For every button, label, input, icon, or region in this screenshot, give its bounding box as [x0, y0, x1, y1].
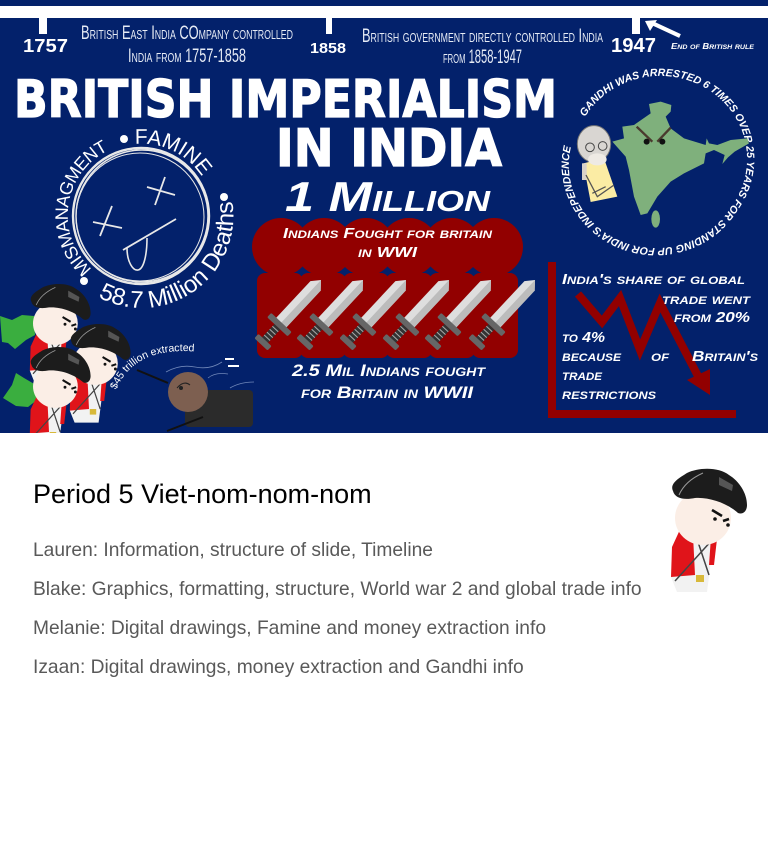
credit: Izaan: Izaan: Digital drawings, money extraction and Gandhi info	[33, 657, 524, 678]
credit: Melanie: Melanie: Digital drawings, Famine and money extraction info	[33, 618, 546, 639]
map of India	[612, 102, 749, 228]
trade text: trade	[562, 367, 603, 384]
falling trade arrow	[578, 294, 710, 395]
WWI text: Indians Fought for britain	[283, 225, 493, 242]
credit: Lauren: Lauren: Information, structure of slide, Timeline	[33, 540, 433, 561]
WWII text	[291, 361, 487, 402]
title	[14, 70, 557, 179]
East India Company text: British East India COmpany controlled	[81, 23, 293, 44]
flies and stench	[166, 358, 254, 388]
Gandhi figure	[577, 126, 617, 202]
famine ring text	[55, 129, 234, 308]
famine ring text: FAMINE	[136, 129, 213, 176]
British government text	[362, 26, 603, 68]
fallen man	[137, 370, 253, 431]
1 Million heading: 1 Million	[285, 173, 491, 220]
swords	[251, 270, 545, 354]
East India Company text: India from 1757-1858	[128, 46, 246, 67]
timeline	[0, 6, 768, 34]
trade text: because	[562, 348, 622, 365]
banner background	[0, 0, 768, 433]
trade text	[562, 271, 759, 403]
trade text: of	[651, 348, 669, 365]
year 1947: 1947	[611, 35, 656, 57]
British government text: from 1858-1947	[443, 47, 522, 68]
famine ring text: MISMANAGMENT	[55, 140, 104, 277]
icon: green leaves	[0, 315, 37, 407]
money extracted label: $45 trillion extracted	[110, 344, 194, 389]
soldier illustration	[671, 468, 747, 592]
soldier 2	[70, 324, 131, 423]
WWI text: in WWI	[358, 244, 418, 261]
famine ring text: 58.7 Million Deaths	[100, 202, 234, 308]
year 1757: 1757	[23, 36, 68, 56]
dead face	[73, 148, 209, 284]
title: BRITISH IMPERIALISM	[14, 70, 557, 130]
WWII red panel	[257, 273, 518, 358]
trade text: Britain's	[692, 348, 759, 365]
WWII text: for Britain in WWII	[301, 383, 475, 402]
title: IN INDIA	[276, 119, 502, 179]
East India Company text	[81, 23, 293, 67]
trade text: India's share of global	[562, 271, 745, 288]
team heading: Period 5 Viet-nom-nom-nom	[33, 479, 372, 509]
trade text: trade went	[662, 291, 752, 308]
WWI red panel	[252, 218, 523, 276]
soldier 1	[30, 284, 91, 383]
Gandhi ring text: GANDHI WAS ARRESTED 6 TIMES OVER 25 YEARS FOR STANDING UP FOR INDIA'S INDEPENDENCE	[562, 68, 754, 256]
British government text: British government directly controlled India	[362, 26, 603, 47]
trade text: restrictions	[562, 386, 657, 403]
end of British rule label: End of British rule	[671, 42, 755, 51]
trade text: to 4%	[562, 329, 605, 346]
trade text: from 20%	[674, 309, 750, 326]
soldier 3	[30, 347, 91, 446]
arrow: end of British rule	[645, 20, 680, 36]
famine circle	[55, 129, 234, 308]
infographic banner	[0, 0, 768, 433]
chart axes	[552, 262, 736, 414]
credit: Blake: Blake: Graphics, formatting, structure, World war 2 and global trade info	[33, 579, 642, 600]
WWI text	[283, 225, 493, 261]
WWII text: 2.5 Mil Indians fought	[291, 361, 487, 380]
year 1858: 1858	[310, 40, 346, 57]
global trade chart	[552, 262, 759, 414]
